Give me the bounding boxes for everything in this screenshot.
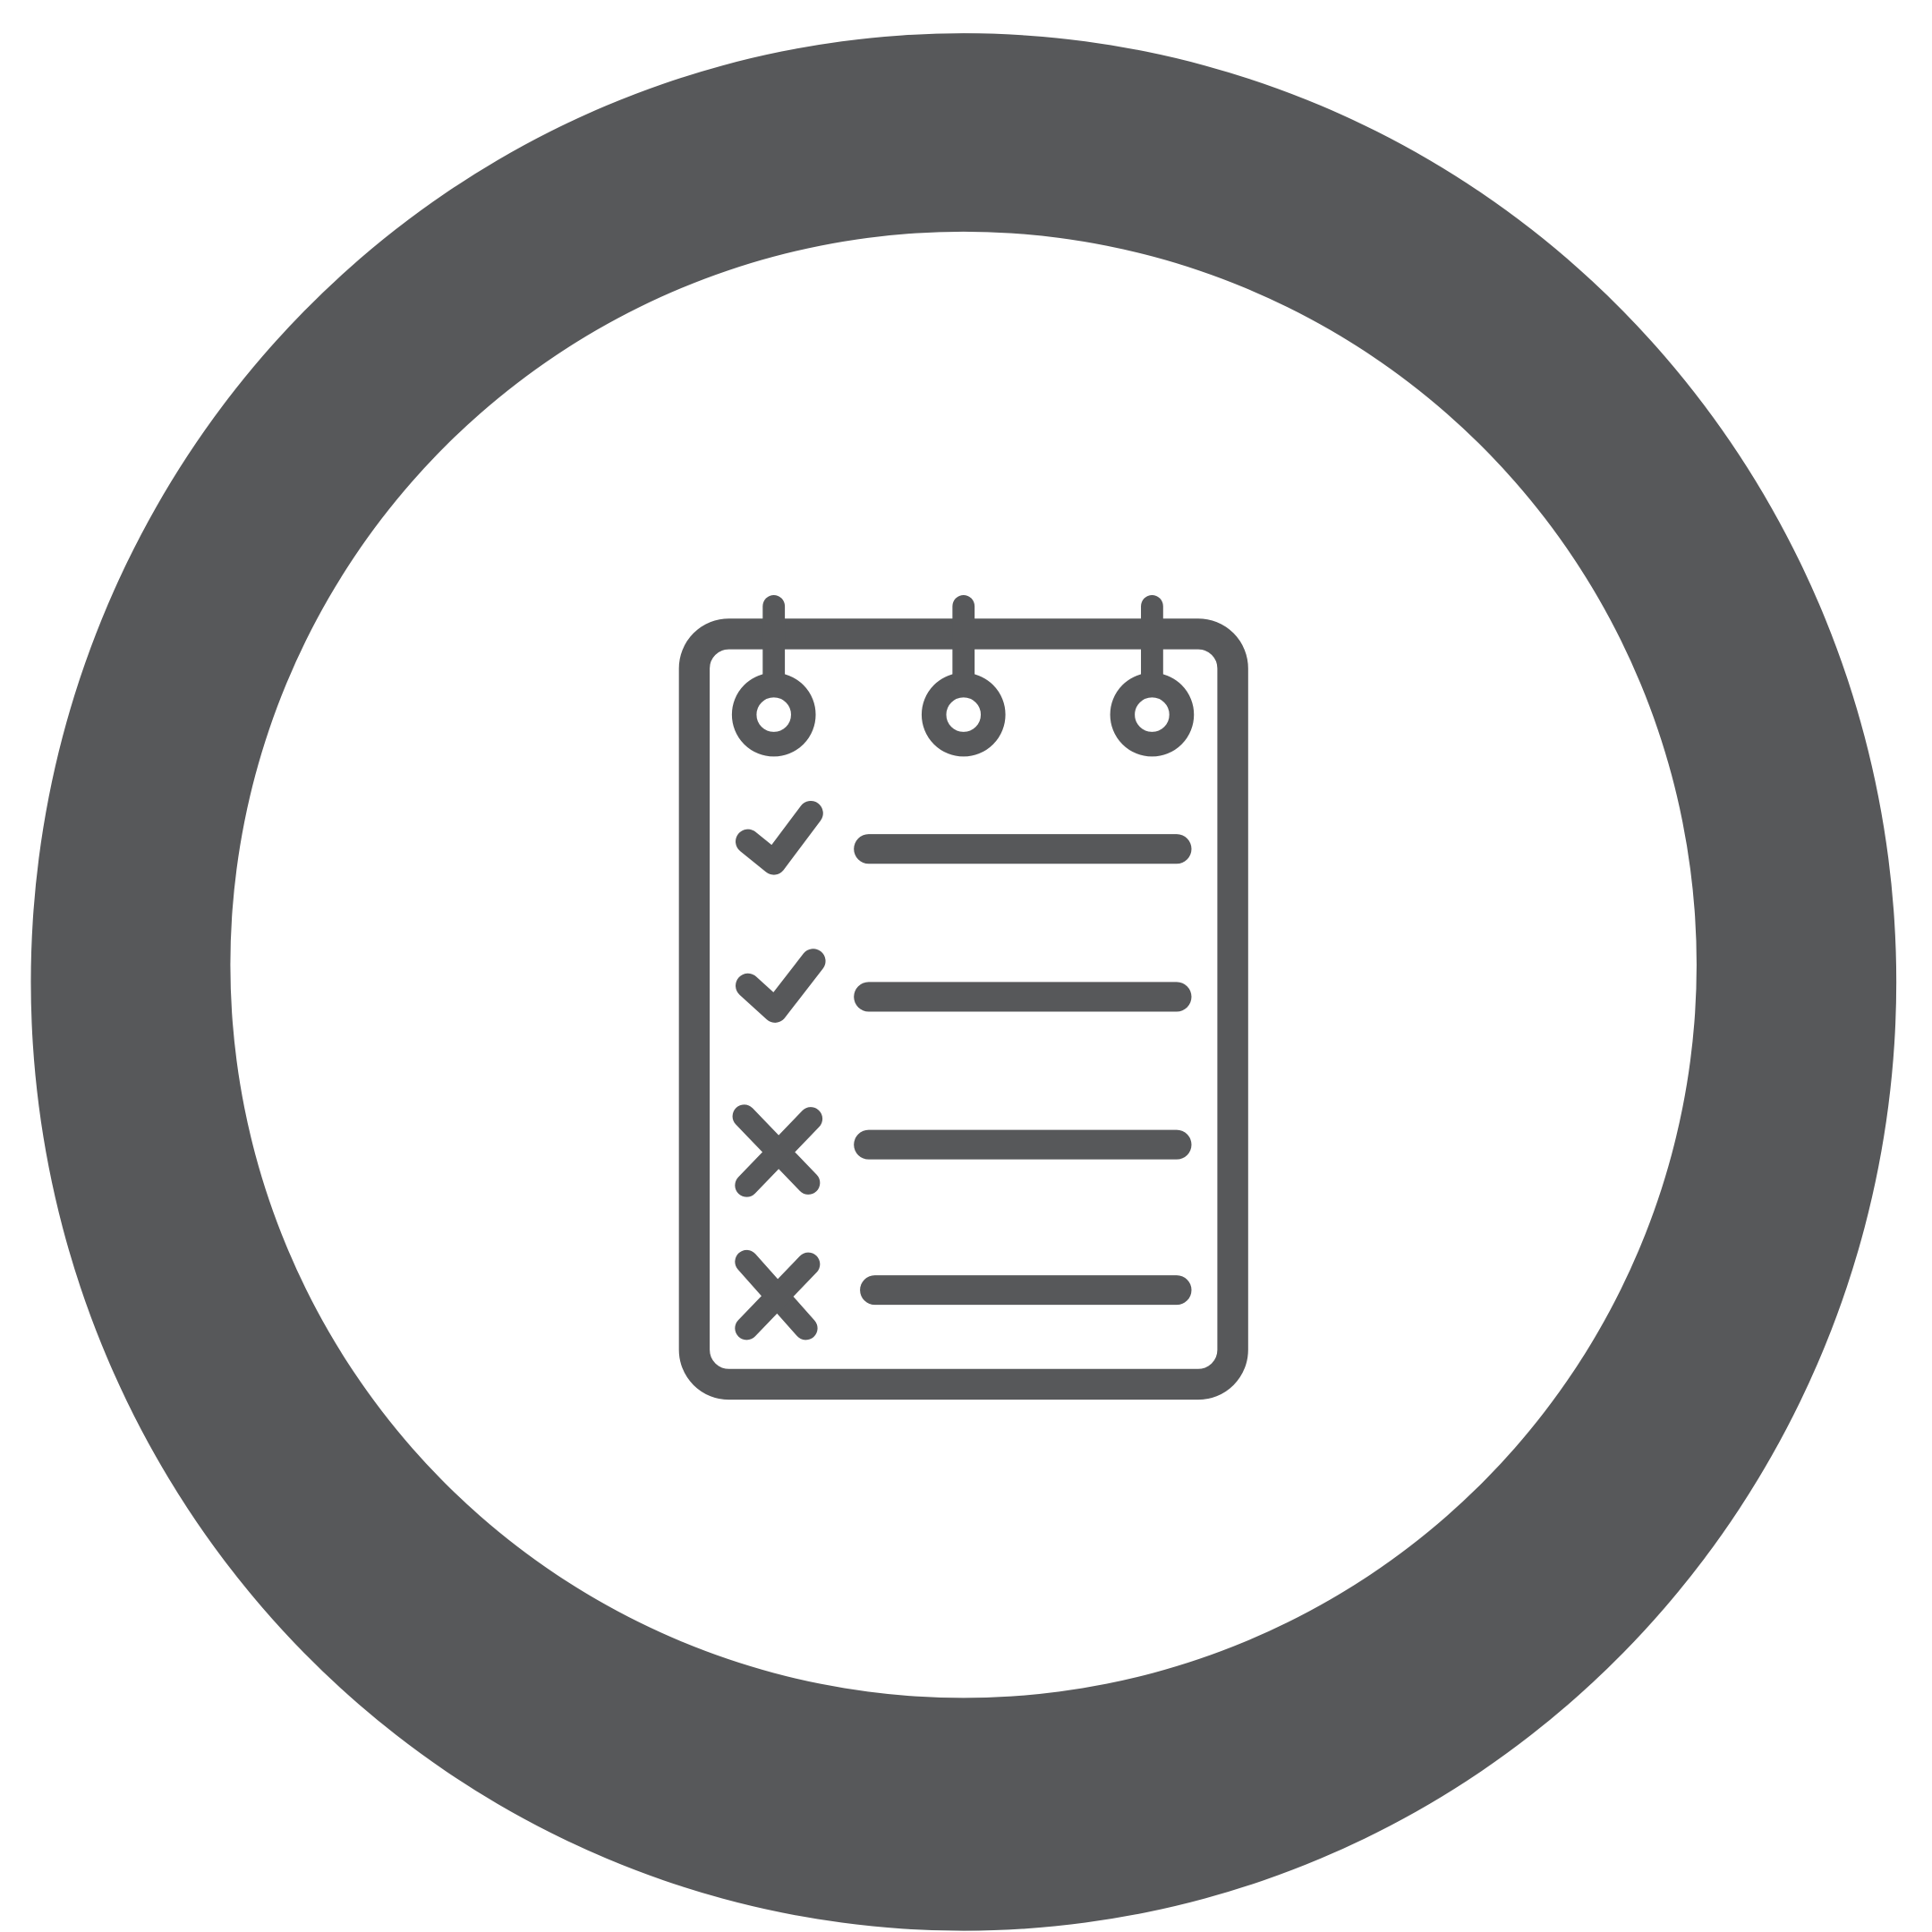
clipboard xyxy=(694,606,1233,1384)
clipboard body xyxy=(694,634,1233,1384)
check marks xyxy=(748,813,813,1010)
crosses xyxy=(745,1116,811,1328)
ring hooks xyxy=(774,606,1152,685)
item lines xyxy=(869,849,1177,1290)
binder rings xyxy=(745,685,1181,745)
